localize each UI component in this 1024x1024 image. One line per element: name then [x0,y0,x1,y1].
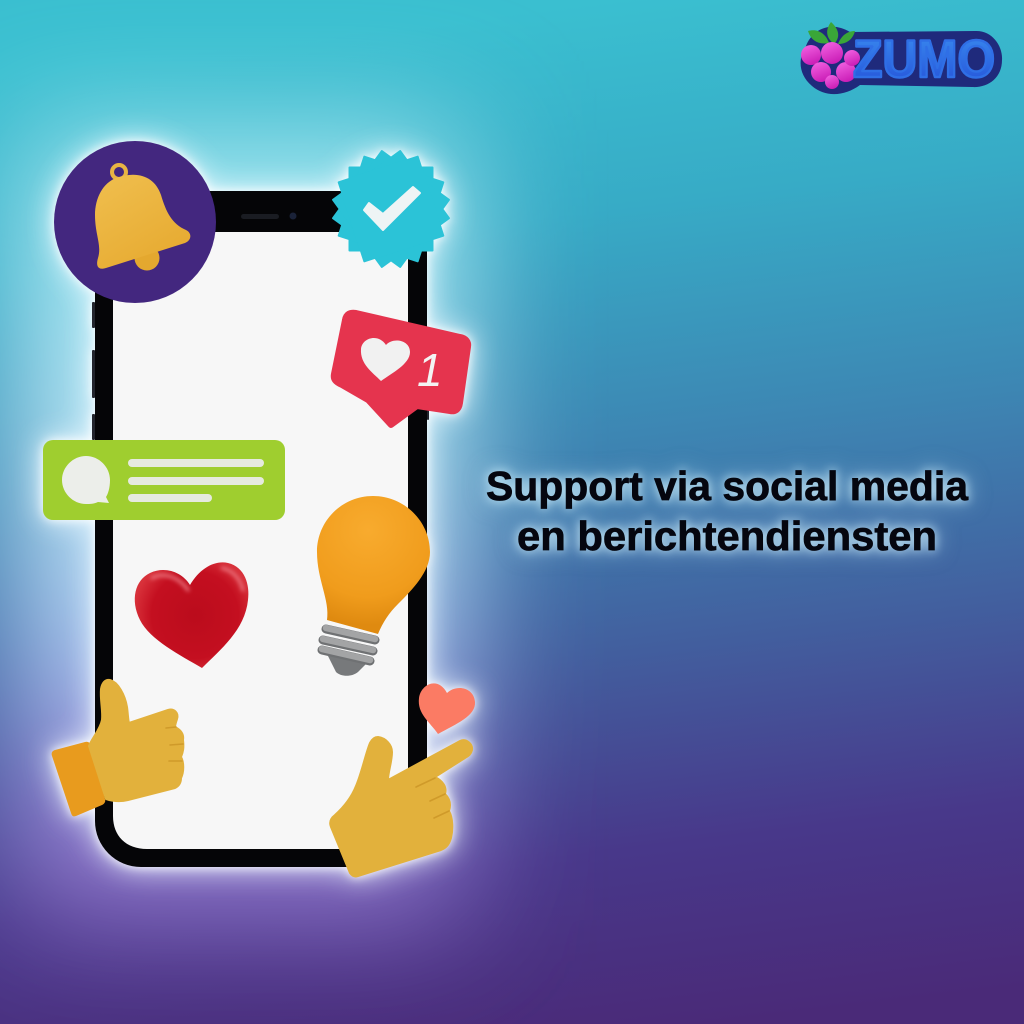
bulb base threads [322,629,375,661]
phone [92,191,429,867]
bubble count: 1 [417,344,443,396]
heart highlight [152,568,243,590]
heading [486,463,969,559]
bulb base cap [326,652,368,676]
logo leaves [808,22,855,44]
logo: Zumo [801,22,1002,94]
bubble heart [361,338,410,381]
phone side buttons [92,302,429,440]
card body [43,440,285,520]
bell loop [112,165,126,179]
phone illustration with floating icons [43,141,475,876]
bubble shape [334,313,468,425]
bell body [95,175,190,269]
phone speaker and camera [241,212,296,220]
icon: thumbs up hand [52,680,183,816]
phone body [95,191,427,867]
icon: pointing hand [330,737,472,876]
bell badge disc [54,141,216,303]
pointing hand finger creases [416,778,449,818]
icon: light bulb [317,496,430,676]
icon: verified badge [332,150,450,268]
verified check mark [364,187,420,230]
verified star shape [332,150,450,268]
pointing hand shape [330,737,472,876]
logo backing outline [801,27,1002,94]
thumbs up palm and fingers [89,680,183,801]
card text lines [128,459,264,502]
icon: red heart [135,562,248,668]
icon: like notification bubble [334,313,468,425]
logo wordmark: ZUMO [853,30,995,89]
card speech icon [62,456,110,504]
thumbs up finger creases [166,727,183,761]
bulb glass [317,496,430,634]
bell clapper [134,246,160,270]
phone screen [113,232,408,849]
icon: small coral heart [419,683,475,734]
logo raspberry [801,42,860,89]
icon: bell badge [54,141,216,303]
heading line 2: en berichtendiensten [517,513,937,559]
heading line 1: Support via social media [486,463,969,509]
bulb base thread highlights [322,628,375,660]
message card [43,440,285,520]
thumbs up cuff [52,742,105,816]
